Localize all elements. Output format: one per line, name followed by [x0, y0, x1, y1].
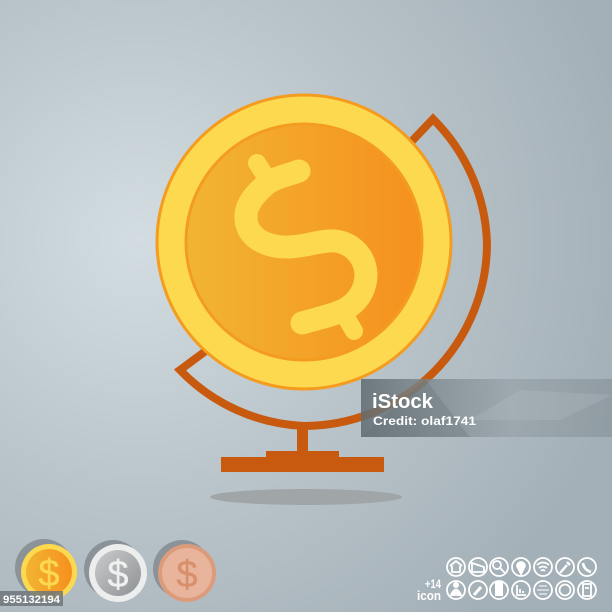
globe stand — [180, 119, 487, 472]
coin variant: gold: $ — [38, 553, 60, 595]
image id label: 955132194 — [3, 594, 61, 606]
icon set, row two — [447, 581, 596, 599]
plus 14 icon label: icon — [417, 588, 441, 603]
coin variant: gold — [15, 539, 77, 600]
dollar sign — [246, 163, 366, 331]
gold dollar coin — [157, 95, 451, 389]
icon set, row one — [447, 558, 596, 576]
coin variant: bronze — [153, 540, 216, 602]
watermark brand: iStock — [372, 391, 434, 413]
plus 14 icon label — [417, 577, 441, 603]
watermark credit: Credit: olaf1741 — [373, 414, 476, 428]
coin variant: silver: $ — [107, 554, 129, 596]
coin variant: bronze: $ — [176, 554, 198, 596]
watermark panel — [361, 379, 612, 437]
plus 14 icon label: +14 — [425, 577, 441, 591]
ground shadow — [210, 489, 402, 505]
image id label — [0, 591, 63, 606]
coin variant: silver — [84, 540, 147, 602]
